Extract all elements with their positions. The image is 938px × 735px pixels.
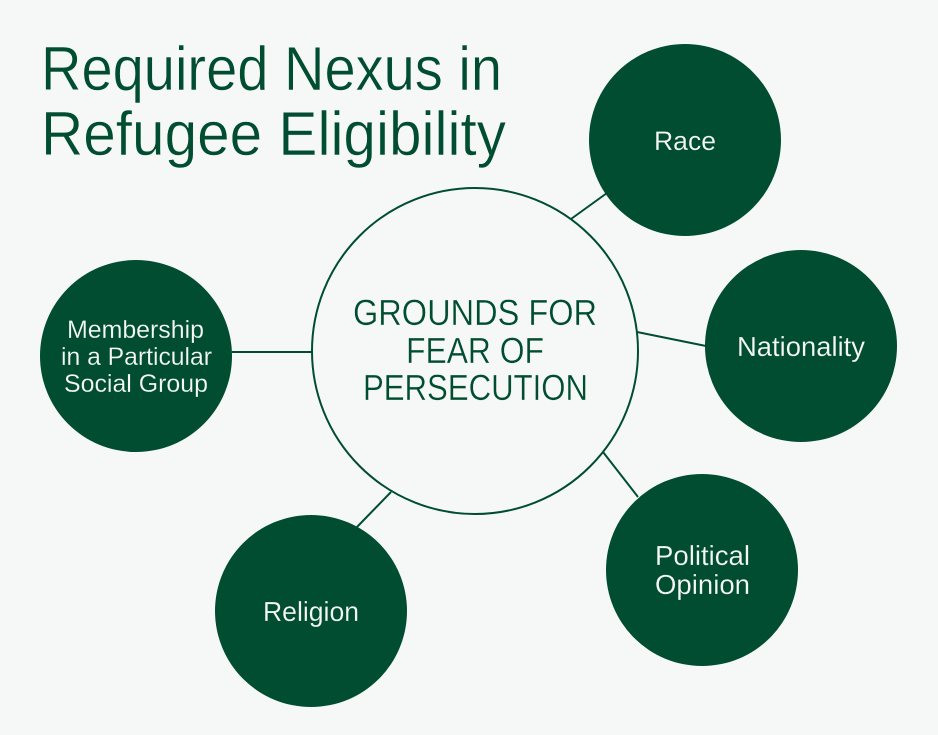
circle: Political Opinion: Political xyxy=(655,540,750,571)
title: Required Nexus in xyxy=(41,35,502,104)
connector lines xyxy=(232,193,706,527)
circle: Race xyxy=(589,44,781,236)
circle: Race: Race xyxy=(654,126,716,156)
circle: Nationality xyxy=(705,250,897,442)
circle: Religion: Religion xyxy=(263,596,359,627)
circle: Nationality: Nationality xyxy=(737,331,865,362)
central circle xyxy=(312,188,638,514)
title: Refugee Eligibility xyxy=(41,100,506,169)
circle: Membership in a Particular Social Group: Membership xyxy=(67,316,204,344)
central circle: GROUNDS FOR xyxy=(353,292,597,333)
circle: Religion xyxy=(215,515,407,707)
circle: Membership in a Particular Social Group xyxy=(40,260,232,452)
circle: Membership in a Particular Social Group: in a Particular xyxy=(61,343,212,371)
circle: Membership in a Particular Social Group: Social Group xyxy=(64,370,208,398)
circle: Political Opinion xyxy=(606,474,798,666)
circle: Political Opinion: Opinion xyxy=(655,569,750,600)
central circle: PERSECUTION xyxy=(363,367,588,408)
central circle: FEAR OF xyxy=(406,330,544,371)
title xyxy=(41,35,506,169)
